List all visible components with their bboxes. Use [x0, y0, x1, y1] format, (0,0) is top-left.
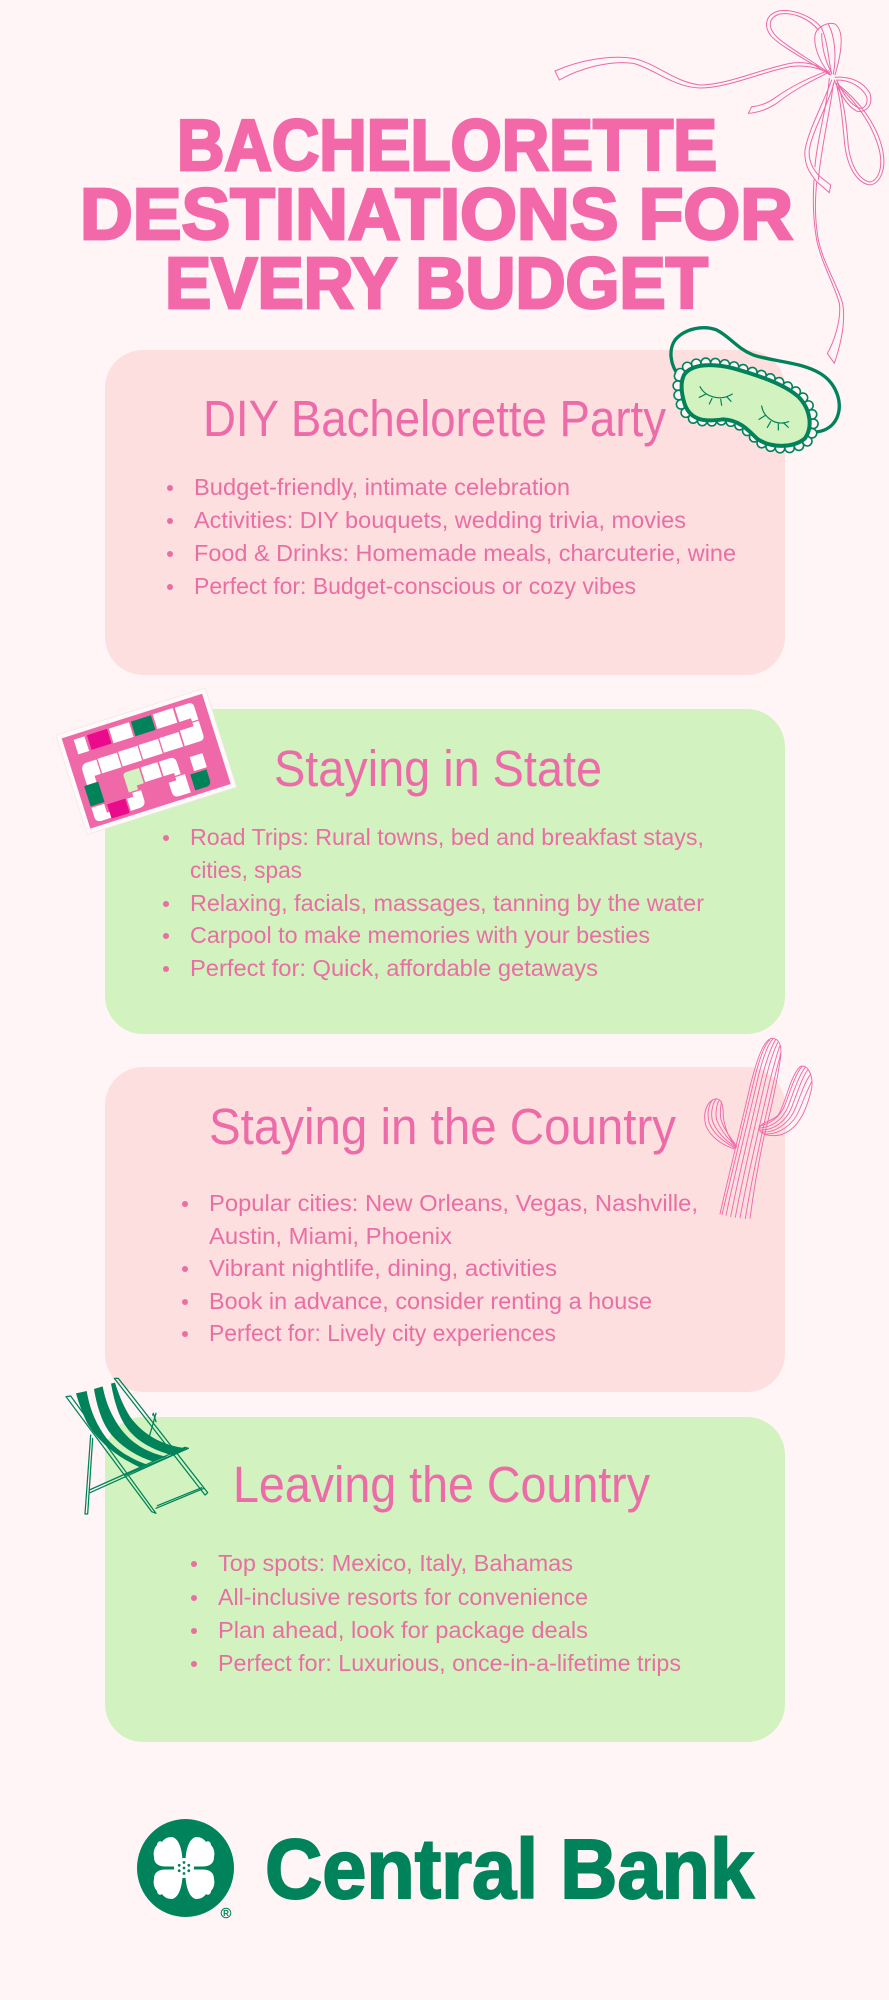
logo emblem [137, 1819, 234, 1917]
title: DESTINATIONS FOR [80, 175, 793, 255]
panel: Staying in the Country [105, 1067, 785, 1392]
bullet list: Relaxing, facials, massages, tanning by the water [190, 890, 704, 916]
panel: DIY Bachelorette Party [105, 350, 785, 675]
icon: board game map [56, 688, 237, 834]
bullet list: Perfect for: Luxurious, once-in-a-lifetime trips [218, 1650, 681, 1676]
bullet list [163, 824, 704, 981]
panel: Staying in State [105, 709, 785, 1034]
chair frame [66, 1378, 208, 1514]
bullet list [191, 1550, 681, 1676]
logo: Central Bank [137, 1819, 754, 1918]
icon: line-art cactus [705, 1038, 812, 1219]
white four-petal flower [154, 1837, 214, 1899]
bullet list: All-inclusive resorts for convenience [218, 1584, 588, 1610]
bullet list [182, 1190, 698, 1346]
bullet list: Carpool to make memories with your besties [190, 922, 650, 948]
icon: striped beach chair [66, 1378, 208, 1514]
panel: Leaving the Country [105, 1417, 785, 1742]
bullet list: Austin, Miami, Phoenix [209, 1223, 453, 1249]
bullet list: Vibrant nightlife, dining, activities [209, 1255, 557, 1281]
icon: sleep mask [671, 328, 839, 448]
wordmark: Central Bank [265, 1822, 754, 1916]
bullet list: Activities: DIY bouquets, wedding trivia, movies [194, 507, 686, 533]
bullet list: Popular cities: New Orleans, Vegas, Nashville, [209, 1190, 698, 1216]
bullet list [167, 474, 736, 599]
bullet list: Food & Drinks: Homemade meals, charcuterie, wine [194, 540, 736, 566]
bullet list: Road Trips: Rural towns, bed and breakfast stays, [190, 824, 704, 850]
icon: pink ribbon bow [555, 11, 884, 363]
registered mark: R [223, 1909, 229, 1918]
bullet list: cities, spas [190, 857, 302, 883]
heading: Staying in the Country [209, 1098, 676, 1155]
bullet list: Perfect for: Lively city experiences [209, 1320, 556, 1346]
chair canvas stripes [76, 1383, 187, 1467]
heading: Staying in State [274, 740, 602, 797]
bullet list: Budget-friendly, intimate celebration [194, 474, 570, 500]
title: EVERY BUDGET [165, 244, 708, 324]
title [80, 106, 793, 324]
bullet list: Perfect for: Quick, affordable getaways [190, 955, 598, 981]
bullet list: Plan ahead, look for package deals [218, 1617, 588, 1643]
bullet list: Top spots: Mexico, Italy, Bahamas [218, 1550, 573, 1576]
title: BACHELORETTE [177, 106, 717, 186]
bullet list: Book in advance, consider renting a house [209, 1288, 652, 1314]
heading: Leaving the Country [233, 1456, 650, 1513]
bullet list: Perfect for: Budget-conscious or cozy vibes [194, 573, 636, 599]
heading: DIY Bachelorette Party [203, 390, 666, 447]
registered mark [221, 1908, 231, 1918]
